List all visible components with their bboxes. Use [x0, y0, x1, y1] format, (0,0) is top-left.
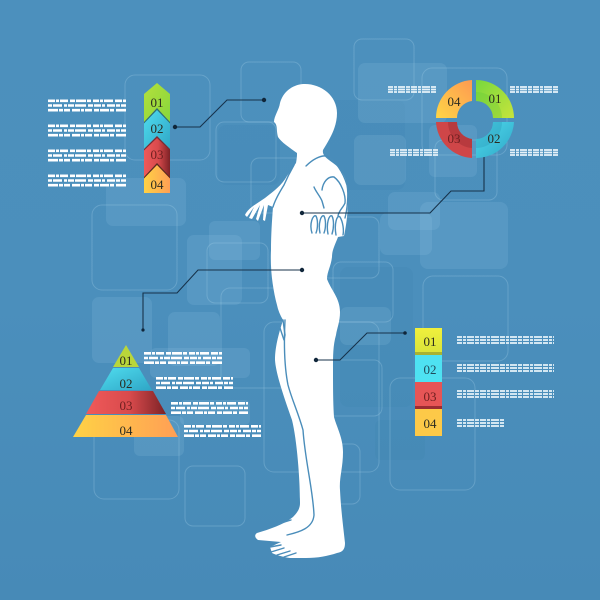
segment 02: 02 [488, 131, 500, 146]
body shape [245, 84, 348, 558]
tier 03: 03 [120, 398, 132, 413]
tier 02: 02 [120, 376, 132, 391]
connector: chevrons to head [173, 98, 266, 129]
connector: squares to thigh [314, 331, 407, 362]
segment 01: 01 [488, 91, 502, 106]
square list text [457, 337, 554, 426]
square 03: 03 [424, 389, 436, 404]
pyramid text [144, 353, 261, 436]
human body silhouette [245, 84, 348, 558]
pyramid [73, 345, 178, 438]
chevron list [144, 83, 170, 193]
tier 04: 04 [120, 423, 133, 438]
square list [415, 328, 442, 436]
square 01: 01 [424, 334, 436, 349]
square 02: 02 [424, 362, 436, 377]
chevron 04: 04 [150, 177, 164, 192]
chevron list text [48, 101, 126, 185]
donut text [388, 87, 558, 155]
connector: donut to arm [300, 155, 484, 215]
connector: pyramid to torso [141, 268, 304, 332]
chevron 01: 01 [150, 95, 164, 110]
body contour lines [270, 156, 348, 557]
segment 04: 04 [448, 94, 461, 109]
donut chart [436, 80, 514, 158]
chevron 02: 02 [150, 121, 164, 136]
square 04: 04 [424, 416, 437, 431]
background rounded panels [92, 39, 508, 526]
segment 03: 03 [448, 131, 460, 146]
chevron 03: 03 [150, 147, 164, 162]
tier 01: 01 [120, 353, 132, 368]
